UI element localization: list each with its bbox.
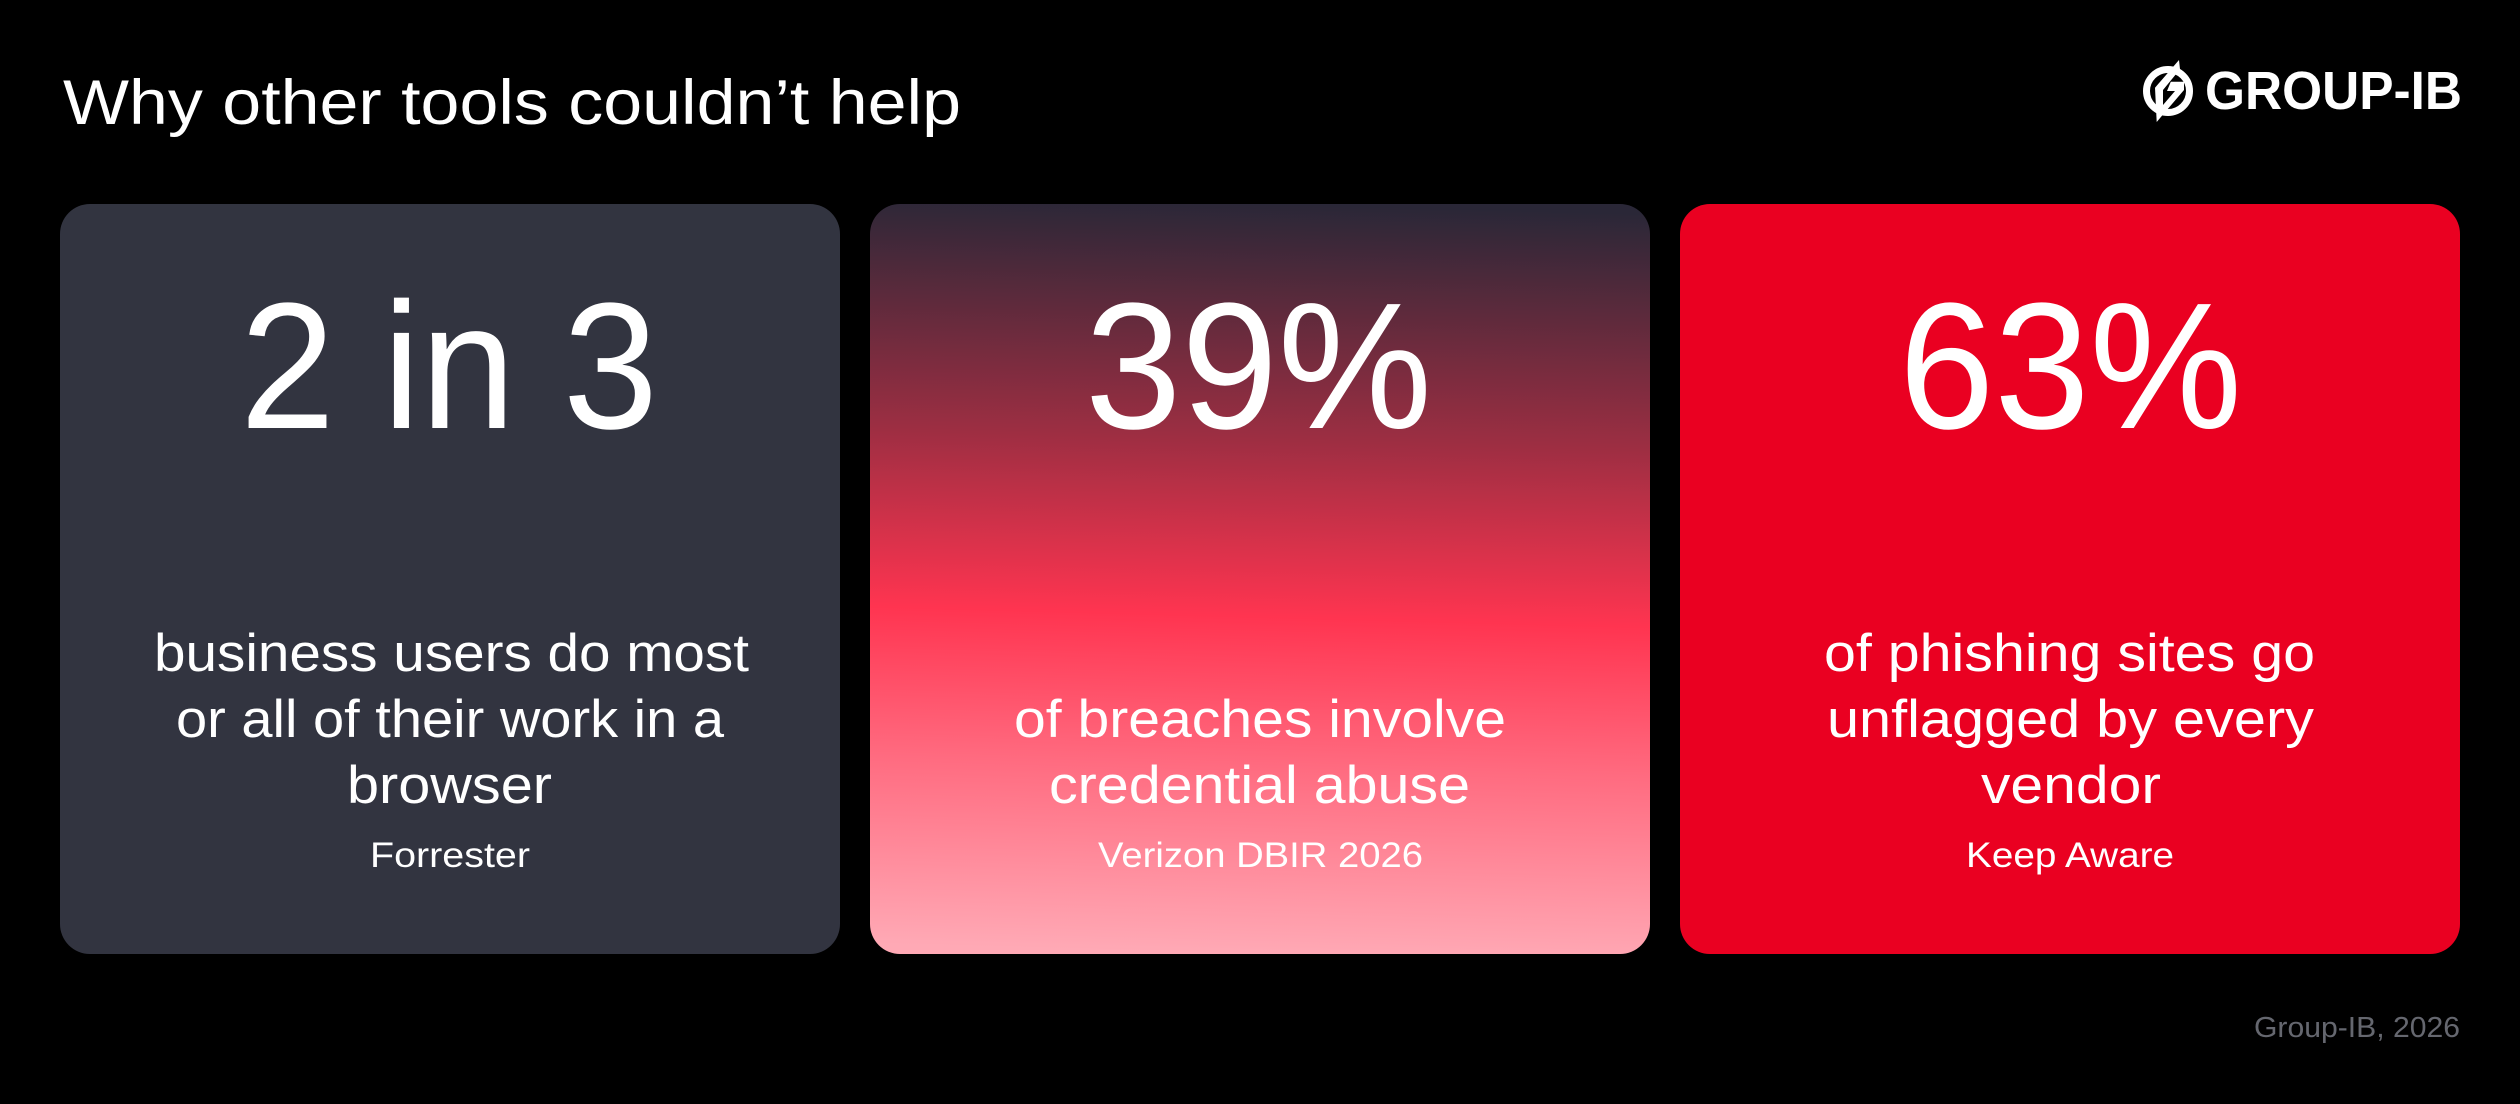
description: vendor [1981, 756, 2161, 815]
footer credit: Group-IB, 2026 [2254, 1012, 2460, 1044]
panel: 39% [870, 204, 1650, 954]
card background [60, 204, 840, 954]
source: Keep Aware: Keep Aware [1966, 836, 2174, 875]
description [1014, 690, 1506, 815]
description [1824, 624, 2315, 815]
card background [870, 204, 1650, 954]
source: Verizon DBIR 2026: Verizon DBIR 2026 [1098, 836, 1423, 875]
logo: Group-IB [2146, 60, 2462, 122]
description: browser [347, 756, 552, 815]
title: Why other tools couldn’t help [63, 68, 961, 138]
icon: logo mark [2146, 60, 2190, 122]
stat: 39%: 39% [1085, 266, 1432, 467]
description: business users do most [154, 624, 749, 683]
description: credential abuse [1049, 756, 1470, 815]
wordmark: GROUP-IB [2205, 61, 2462, 121]
description: of phishing sites go [1824, 624, 2315, 683]
description: unflagged by every [1827, 690, 2315, 749]
stat: 2 in 3: 2 in 3 [240, 266, 658, 467]
description [154, 624, 749, 815]
panel: 2 in 3 [60, 204, 840, 954]
description: of breaches involve [1014, 690, 1506, 749]
source: Forrester: Forrester [370, 836, 530, 875]
description: or all of their work in a [176, 690, 725, 749]
stat: 63%: 63% [1899, 266, 2242, 467]
card background [1680, 204, 2460, 954]
panel: 63% [1680, 204, 2460, 954]
